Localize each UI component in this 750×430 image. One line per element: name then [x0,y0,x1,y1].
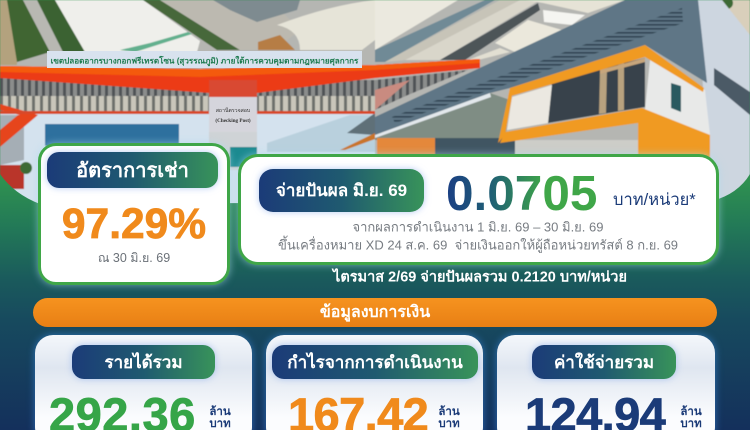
banner sign [47,51,362,68]
expenses unit: ล้าน [680,406,702,418]
expenses unit: บาท [680,418,702,430]
panel: total expenses [497,335,715,430]
revenue pill [72,345,215,379]
expenses unit [680,405,702,430]
profit unit: ล้าน [438,406,460,418]
profit unit: บาท [438,418,460,430]
financial data heading bar: ข้อมูลงบการเงิน [320,304,430,321]
revenue pill: รายได้รวม [104,352,183,372]
photo: logistics warehouse and orange building: (Checking Post) [215,117,251,124]
revenue unit: บาท [209,418,231,430]
quarter dividend note: ไตรมาส 2/69 จ่ายปันผลรวม 0.2120 บาท/หน่วย [333,270,627,286]
revenue unit: ล้าน [209,406,231,418]
panel: occupancy rate [38,143,230,285]
profit pill: กำไรจากการดำเนินงาน [287,352,463,372]
panel: dividend [238,154,719,265]
photo: logistics warehouse and orange building: สถานีตรวจสอบ [216,107,250,114]
photo: logistics warehouse and orange building [0,0,750,204]
profit pill [272,345,478,379]
panel: operating profit [266,335,483,430]
occupancy heading pill [47,152,218,188]
photo: logistics warehouse and orange building: เขตปลอดอากรบางกอกฟรีเทรดโซน (สุวรรณภูมิ) ภายใต้การควบคุมตามกฎหมายศุลกากร [51,56,359,66]
dividend unit: บาท/หน่วย* [613,191,696,209]
dividend period: จากผลการดำเนินงาน 1 มิ.ย. 69 – 30 มิ.ย. 69 [353,220,603,234]
expenses pill [532,345,676,379]
occupancy date: ณ 30 มิ.ย. 69 [98,251,170,265]
profit unit [438,405,460,430]
panel: total revenue [35,335,252,430]
expenses pill: ค่าใช้จ่ายรวม [554,352,654,372]
occupancy heading pill: อัตราการเช่า [76,160,189,182]
dividend heading pill [259,169,424,212]
financial data heading bar [33,298,717,327]
dividend heading pill: จ่ายปันผล มิ.ย. 69 [276,181,407,200]
revenue unit [209,405,231,430]
dividend dates: ขึ้นเครื่องหมาย XD 24 ส.ค. 69 จ่ายเงินออกให้ผู้ถือหน่วยทรัสต์ 8 ก.ย. 69 [278,238,678,252]
occupancy value: 97.29% [62,201,206,248]
dividend value: 0.0705 [446,166,597,221]
